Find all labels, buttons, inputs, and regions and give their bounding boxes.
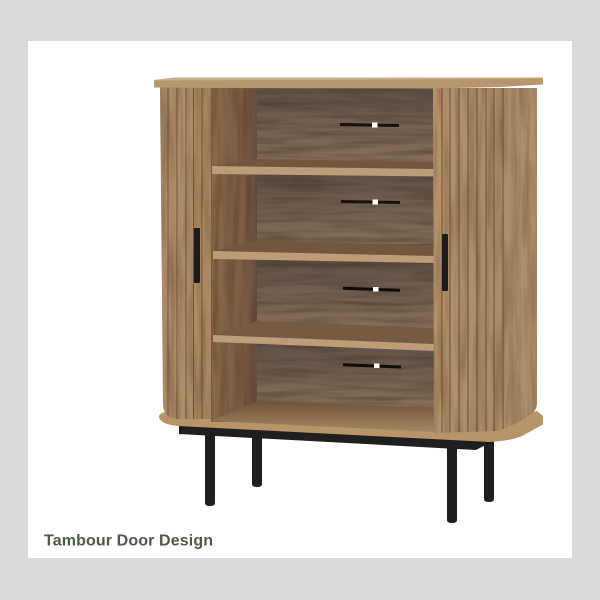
left door edge bbox=[211, 88, 212, 420]
shelf 1 bbox=[212, 159, 434, 176]
leg: back left bbox=[252, 436, 262, 487]
left door handle bbox=[194, 228, 200, 283]
back panel base bbox=[212, 88, 434, 408]
black base rail and legs bbox=[179, 424, 494, 523]
door slat grooves bbox=[168, 87, 202, 419]
back panel: compartment 4 bbox=[212, 342, 434, 408]
shelf 2 bbox=[213, 241, 434, 263]
slot: shelf bracket 3 bbox=[343, 287, 400, 292]
cabinet bbox=[154, 78, 543, 523]
photo panel bbox=[28, 41, 572, 558]
slot: shelf bracket 2 bbox=[341, 200, 400, 204]
leg: front right bbox=[447, 448, 457, 523]
right tambour door bbox=[433, 88, 537, 434]
caption: Tambour Door Design bbox=[44, 532, 213, 550]
right door handle bbox=[442, 234, 448, 291]
leg: back right bbox=[484, 441, 494, 502]
bottom plate bbox=[159, 411, 543, 442]
back panel: compartment 2 bbox=[212, 174, 434, 244]
back panel grain bbox=[212, 88, 434, 408]
shelf 3 bbox=[213, 321, 434, 351]
interior of cabinet bbox=[211, 88, 434, 432]
base rail bbox=[179, 424, 493, 450]
bottom shelf surface bbox=[211, 401, 434, 432]
leg: front left bbox=[205, 432, 215, 506]
left tambour door bbox=[160, 87, 212, 419]
back panel: compartment 1 bbox=[212, 88, 434, 162]
back panel: compartment 3 bbox=[212, 260, 434, 328]
door slat grooves bbox=[442, 88, 503, 434]
slot: shelf bracket 4 bbox=[343, 364, 401, 368]
slot: shelf bracket 1 bbox=[340, 122, 399, 128]
top slab bbox=[154, 78, 543, 88]
left side panel bbox=[211, 88, 257, 422]
